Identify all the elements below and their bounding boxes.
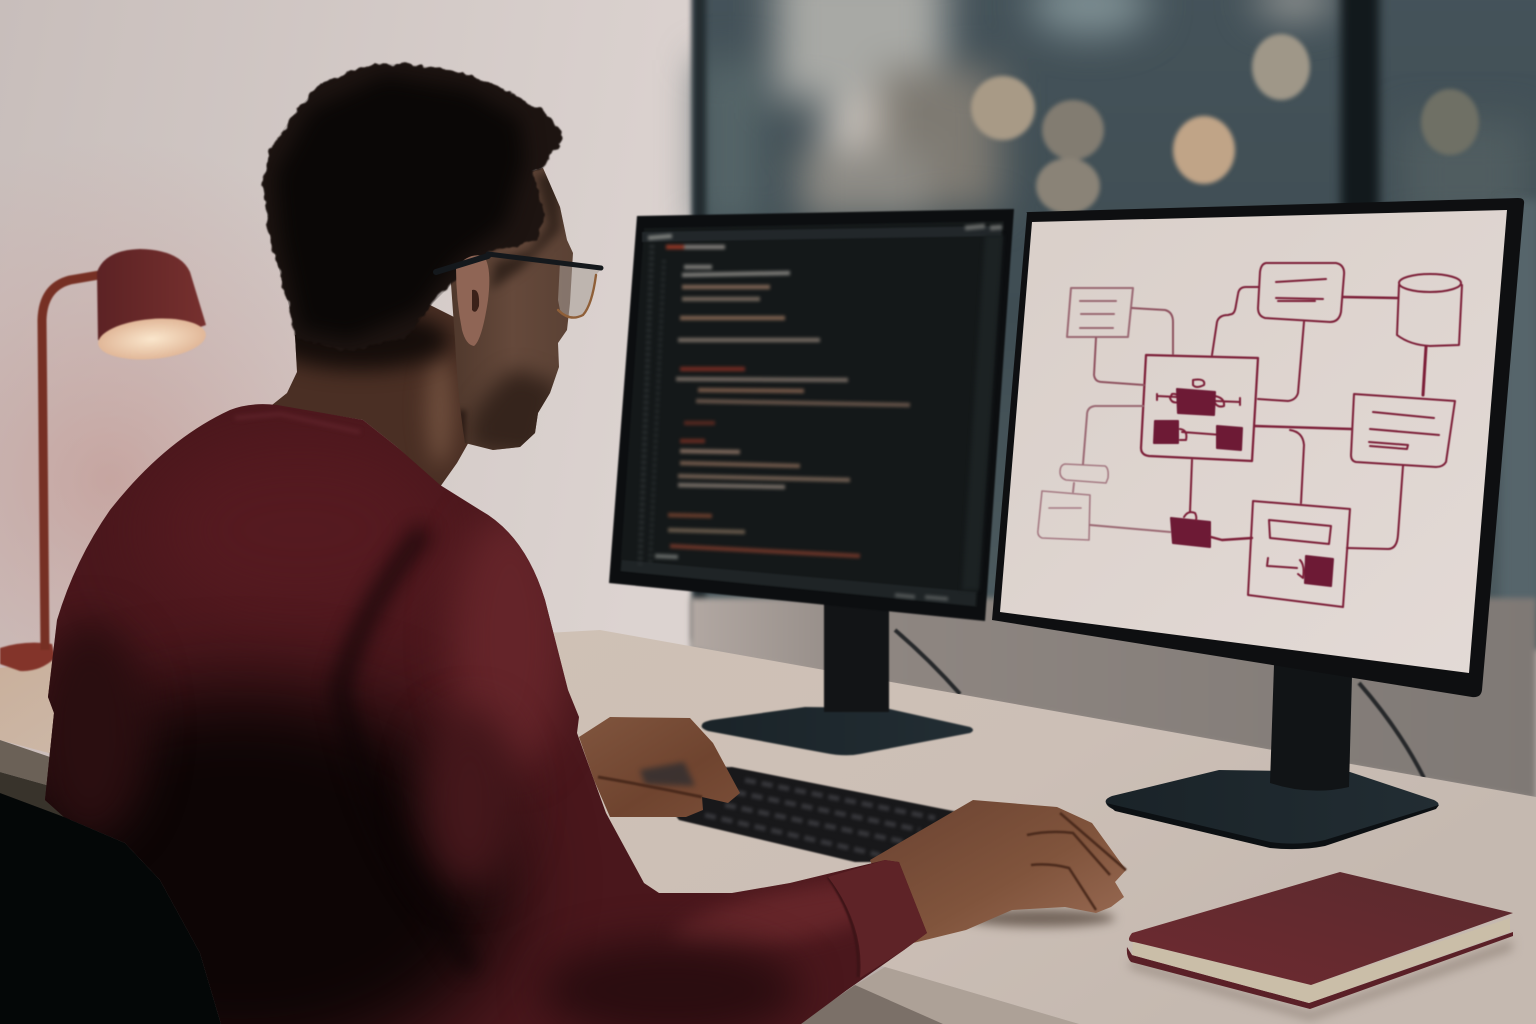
left monitor screen with code <box>620 221 1004 607</box>
right monitor screen <box>1000 210 1507 673</box>
right monitor bezel <box>992 198 1524 697</box>
glasses <box>436 254 602 318</box>
notebook cover <box>1129 872 1513 985</box>
left monitor bezel <box>609 209 1014 621</box>
right monitor <box>992 198 1524 849</box>
left monitor <box>609 209 1014 755</box>
sweater <box>45 404 927 1024</box>
shadows under hand and notebook <box>965 909 1512 1020</box>
hair <box>263 63 563 350</box>
diagram: small pill node <box>1060 464 1108 483</box>
lamp base <box>0 643 55 671</box>
face <box>451 168 573 450</box>
notebook back cover <box>1127 932 1513 1009</box>
notebook <box>1127 872 1513 1009</box>
lamp light opening <box>96 314 208 364</box>
right hand on mouse <box>870 800 1126 945</box>
diagram: small box node <box>1038 491 1090 540</box>
lamp shade <box>97 249 206 341</box>
diagram: database cylinder <box>1397 274 1462 346</box>
keyboard <box>640 767 958 862</box>
diagram: top node <box>1258 263 1344 322</box>
ear inner shadow <box>472 290 479 312</box>
person <box>0 63 1126 1024</box>
right monitor stand <box>1106 665 1439 849</box>
diagram: bottom component node <box>1248 501 1350 607</box>
desk <box>0 630 1536 1024</box>
left hand on keyboard <box>579 717 740 817</box>
lamp stem <box>42 274 105 650</box>
wall background <box>0 0 720 800</box>
architecture diagram <box>1038 263 1462 607</box>
cables behind monitors <box>895 630 1424 778</box>
diagram: dark junction block <box>1171 512 1210 547</box>
diagram: right document node <box>1351 394 1455 467</box>
diagram: top-left document node <box>1067 288 1133 337</box>
neck <box>272 305 468 486</box>
wall below window <box>690 598 1536 800</box>
desk lamp <box>0 249 208 671</box>
ear <box>456 255 489 346</box>
left monitor stand <box>702 600 973 755</box>
diagram: connector lines <box>1073 287 1426 549</box>
notebook pages <box>1132 918 1510 1003</box>
diagram: central component node <box>1141 355 1258 461</box>
window with blurred city lights <box>693 0 1536 650</box>
office chair <box>0 793 221 1024</box>
